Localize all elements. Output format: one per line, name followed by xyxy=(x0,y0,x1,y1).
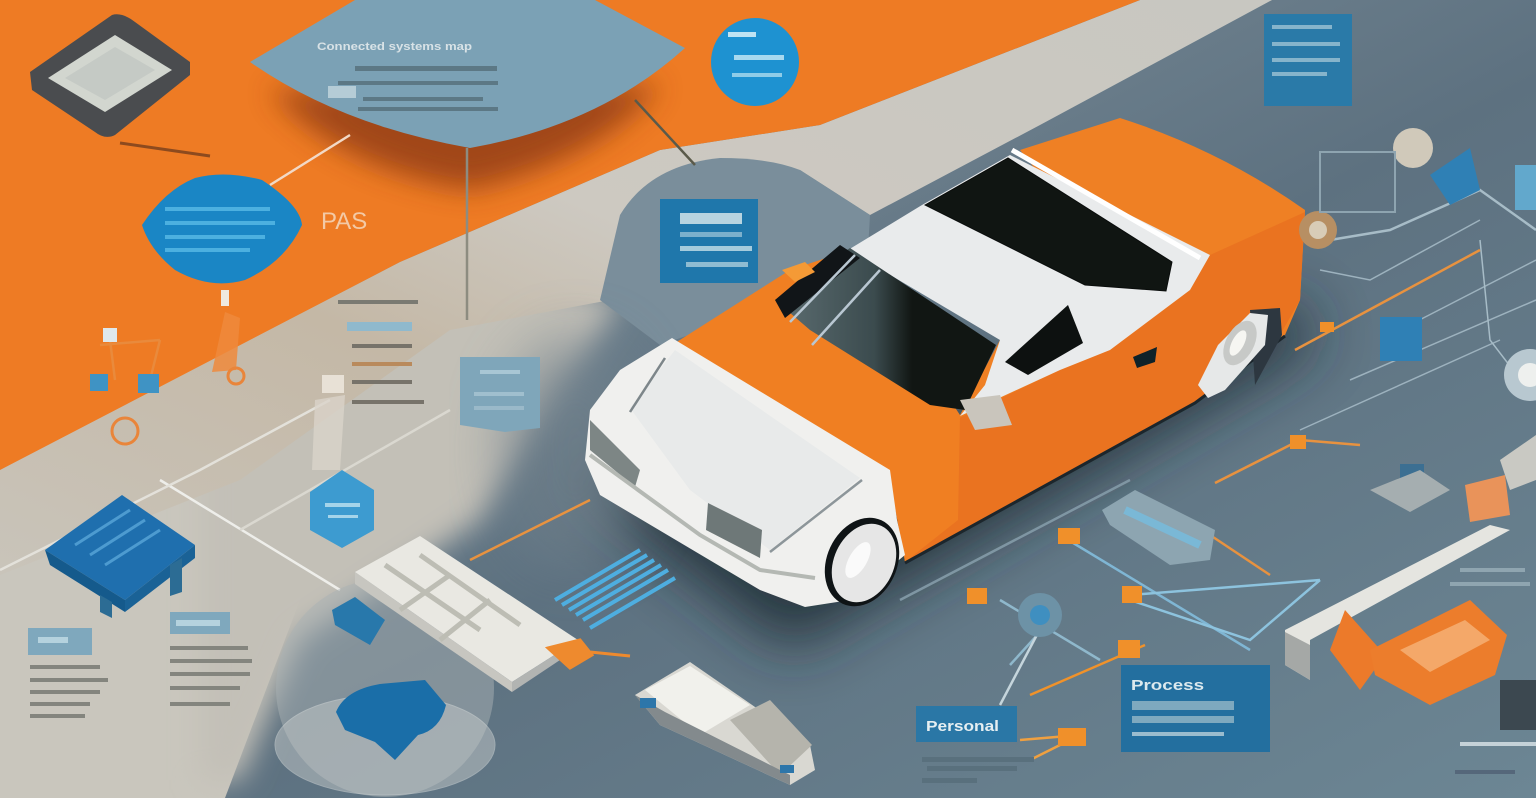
hood panel xyxy=(630,350,860,550)
text block: lower left column one xyxy=(28,628,108,718)
headlight right xyxy=(706,503,762,558)
car ground shadow xyxy=(560,300,1320,650)
leaf heading: Connected systems map xyxy=(317,41,472,53)
roof stripe xyxy=(1012,150,1200,258)
right side round gauge xyxy=(1504,349,1536,401)
bumper line xyxy=(590,455,815,578)
text block: road list xyxy=(338,300,424,404)
right side crate xyxy=(1370,435,1536,522)
small blue tag on module xyxy=(332,597,385,645)
left shadow blend xyxy=(505,340,645,560)
lower left beige ground base xyxy=(0,300,300,798)
right side outlined panel xyxy=(1320,152,1395,212)
icon: blue table device xyxy=(45,495,195,618)
illustration: white ramp and orange crate xyxy=(1285,525,1510,705)
car hood orange xyxy=(672,250,960,562)
icon: target node xyxy=(1018,593,1062,637)
car side panel xyxy=(898,212,1305,562)
panel: translucent note near road xyxy=(460,357,540,432)
icon: small blue nodes xyxy=(1380,148,1536,484)
text block: lower left column two xyxy=(170,612,252,706)
mirror xyxy=(960,395,1012,430)
icon: orange bulb top right xyxy=(1299,128,1433,249)
car underside edge xyxy=(905,336,1285,563)
text block: below Personal note xyxy=(922,757,1034,783)
windshield xyxy=(775,248,996,410)
orange region xyxy=(0,0,1140,470)
icon: blue circle badge xyxy=(711,18,799,106)
icon: person markers on road xyxy=(90,290,345,470)
panel: top right blue note xyxy=(1264,14,1352,106)
front wheel xyxy=(811,506,913,618)
side window xyxy=(1005,305,1083,375)
label: PAS: PAS xyxy=(321,208,367,235)
road band xyxy=(0,0,1272,575)
text block: right side note xyxy=(1450,568,1530,586)
headlight left xyxy=(590,420,640,487)
gray cloud behind label xyxy=(600,158,870,345)
illustration: car xyxy=(585,118,1305,618)
leaf text lines xyxy=(328,66,498,111)
icon: chip top left xyxy=(30,14,190,137)
car front white xyxy=(585,338,905,607)
rear wheel xyxy=(1198,308,1282,398)
white module device xyxy=(332,536,578,692)
shadow under leaf panel xyxy=(270,85,660,190)
illustration: small van xyxy=(635,662,815,785)
blue data beam xyxy=(555,550,675,628)
orange and blue node markers xyxy=(967,322,1334,746)
lower left beige ground blend xyxy=(200,255,620,780)
heading: Personal xyxy=(926,718,999,735)
panel: center blue note xyxy=(660,199,758,283)
orange connector plug xyxy=(548,640,630,668)
orange accent top xyxy=(782,262,815,282)
roof white xyxy=(848,155,1210,416)
panel: blue hexagon note xyxy=(142,174,302,283)
panel: Personal note xyxy=(916,706,1017,742)
rear window xyxy=(925,158,1172,291)
heading: Process xyxy=(1131,677,1204,694)
panel: Process note xyxy=(1121,665,1270,752)
dark tag bottom right xyxy=(1500,680,1536,730)
circular ring base xyxy=(275,579,495,797)
car rear body xyxy=(895,118,1305,562)
text block: bottom right lines xyxy=(1455,742,1536,774)
icon: glass battery device xyxy=(1102,490,1215,565)
caption under chip xyxy=(120,143,210,156)
icon: blue hex badge xyxy=(310,470,374,548)
door handle xyxy=(1133,347,1157,368)
panel: top leaf callout xyxy=(250,0,685,148)
icon: blue blob xyxy=(336,680,446,760)
